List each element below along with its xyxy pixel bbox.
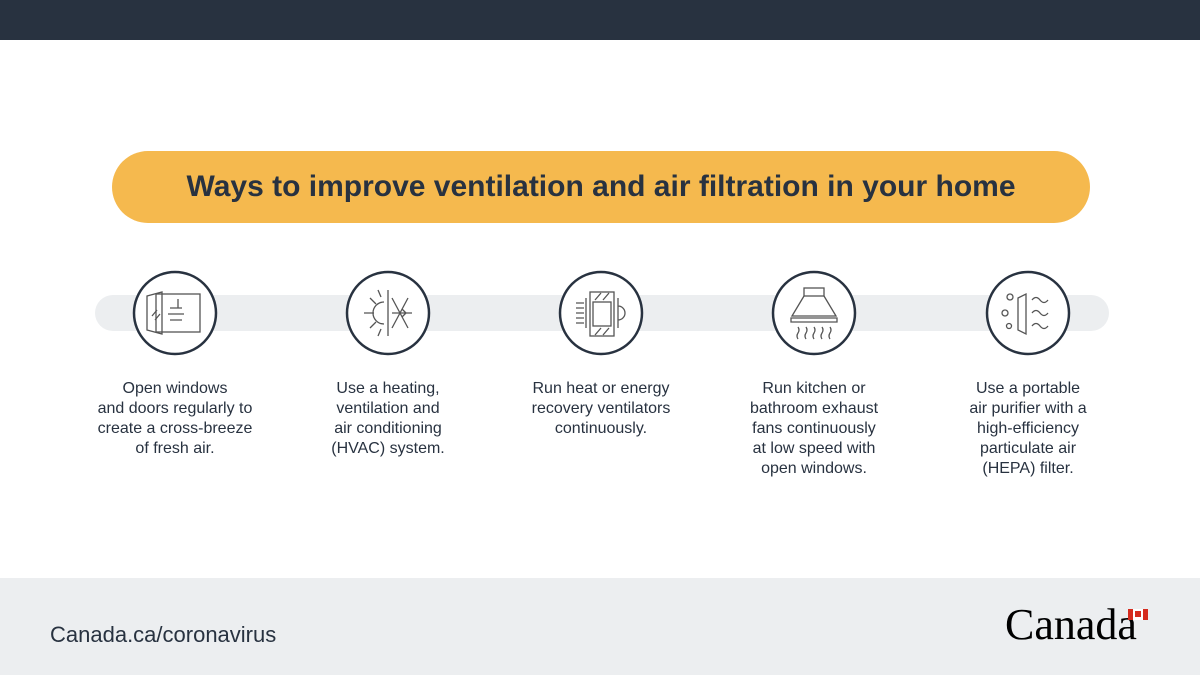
text 5: air purifier with a — [969, 400, 1087, 417]
text 1: of fresh air. — [135, 440, 215, 457]
text 5: (HEPA) filter. — [982, 460, 1074, 477]
text 2 — [331, 380, 445, 457]
text 1: create a cross-breeze — [98, 420, 252, 437]
text 2: ventilation and — [336, 400, 440, 417]
icon: ventilator — [560, 272, 642, 354]
icon: purifier — [987, 272, 1069, 354]
text 1: and doors regularly to — [98, 400, 252, 417]
top bar — [0, 0, 1200, 40]
text 3: recovery ventilators — [532, 400, 670, 417]
text 3: continuously. — [555, 420, 647, 437]
text 4: at low speed with — [753, 440, 875, 457]
text 5 — [969, 380, 1087, 477]
text 2: air conditioning — [334, 420, 442, 437]
track — [95, 295, 1109, 331]
text 4 — [750, 380, 878, 477]
text 3 — [532, 380, 670, 437]
text 2: (HVAC) system. — [331, 440, 445, 457]
text 4: fans continuously — [752, 420, 876, 437]
icon: window — [134, 272, 216, 354]
text 5: particulate air — [980, 440, 1076, 457]
title: Ways to improve ventilation and air filtration in your home — [186, 170, 1016, 203]
text 1 — [98, 380, 252, 457]
text 1: Open windows — [123, 380, 227, 397]
text 5: high-efficiency — [977, 420, 1079, 437]
icon: hood — [773, 272, 855, 354]
icon: hvac — [347, 272, 429, 354]
text 4: bathroom exhaust — [750, 400, 878, 417]
text 3: Run heat or energy — [532, 380, 669, 397]
text 5: Use a portable — [976, 380, 1080, 397]
text 4: open windows. — [761, 460, 867, 477]
logo: Canada wordmark: Canada — [1005, 600, 1137, 649]
text 2: Use a heating, — [336, 380, 440, 397]
text 4: Run kitchen or — [762, 380, 866, 397]
title — [112, 151, 1090, 223]
url: Canada.ca/coronavirus — [50, 622, 276, 647]
footer — [0, 578, 1200, 675]
